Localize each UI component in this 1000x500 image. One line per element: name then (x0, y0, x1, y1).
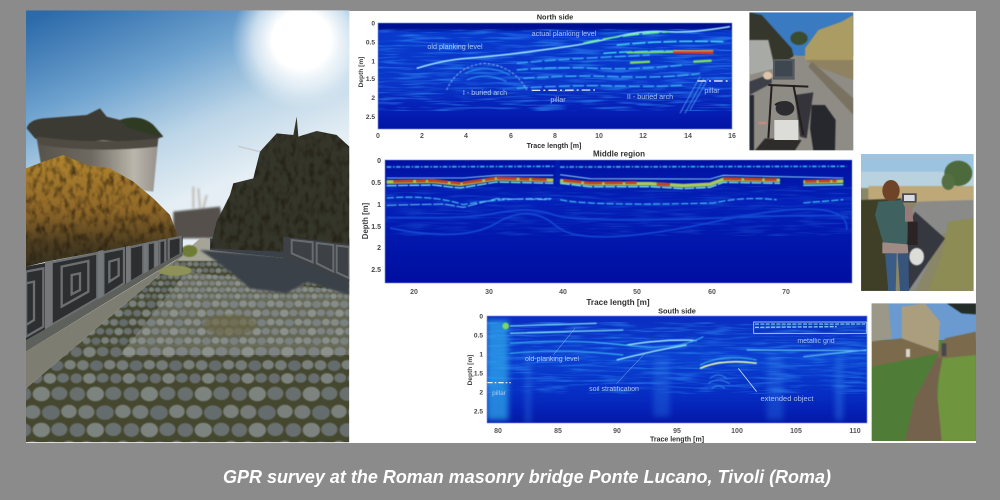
y axis: 1.5 (366, 76, 375, 83)
plot frame (378, 23, 732, 129)
chart: Middle region radargram (361, 150, 852, 307)
cobbled road (20, 235, 353, 445)
y axis: 0 (479, 314, 483, 320)
plot area (487, 316, 867, 423)
y axis (358, 20, 375, 121)
y axis: 0 (371, 20, 375, 28)
y axis: 0.5 (474, 332, 483, 340)
plot area: metallic grid (797, 338, 835, 345)
title: North side (537, 12, 573, 22)
x axis: 8 (553, 133, 557, 140)
street lamp (238, 146, 260, 152)
x axis (376, 133, 736, 150)
x axis: 6 (509, 133, 513, 140)
y axis: 1 (371, 58, 375, 66)
y axis: 2 (371, 95, 375, 102)
photo: survey on grassy path (872, 303, 976, 441)
plot frame (385, 160, 852, 283)
y axis: 1 (479, 352, 483, 358)
plot area: actual planking level (532, 29, 597, 38)
x axis: 20 (410, 289, 418, 296)
x axis: Trace length [m] (650, 436, 704, 444)
road shadow (200, 250, 349, 295)
x axis: 80 (494, 428, 502, 435)
moss patch (203, 314, 257, 336)
title: Middle region (593, 150, 645, 158)
y axis: 2.5 (371, 267, 381, 274)
x axis: 90 (613, 428, 621, 435)
y axis: 1 (377, 202, 381, 209)
y axis: Depth [m] (467, 355, 474, 385)
y axis: 0.5 (371, 180, 381, 187)
y axis: 0.5 (366, 40, 375, 46)
x axis: 30 (485, 289, 493, 296)
operator figure (875, 180, 918, 291)
x axis: 12 (639, 133, 647, 140)
x axis: 50 (633, 289, 641, 296)
y axis: 2.5 (366, 114, 375, 121)
chart: North side radargram (358, 12, 736, 150)
plot area: II - buried arch (627, 92, 673, 101)
plot area: soil stratification (589, 386, 639, 393)
y axis: 1.5 (474, 370, 483, 378)
sky with sun (26, 0, 372, 277)
dark vegetation on right (210, 117, 349, 252)
right railing (283, 237, 349, 282)
sidewalk (26, 256, 183, 388)
grass tufts (158, 245, 197, 276)
annotations: old planking level (427, 42, 483, 51)
Tor Tiburtina round tower (27, 108, 163, 192)
y axis: 2.5 (474, 408, 483, 416)
caption: GPR survey at the Roman masonry bridge Ponte Lucano, Tivoli (Roma) (223, 467, 831, 487)
y axis: 2 (377, 245, 381, 252)
x axis: 60 (708, 289, 716, 296)
distant trees and buildings (173, 187, 227, 238)
y axis: Depth [m] (361, 202, 370, 239)
x axis: 14 (684, 133, 692, 140)
title: South side (658, 306, 696, 316)
x axis: 95 (673, 428, 681, 435)
x axis: 4 (464, 133, 468, 140)
plot area: pillar (550, 95, 566, 104)
y axis (361, 158, 381, 274)
x axis: Trace length [m] (527, 142, 581, 150)
plot area: pillar (492, 390, 507, 397)
x axis: 40 (559, 289, 567, 296)
laptop (773, 59, 795, 80)
y axis: 1.5 (371, 224, 381, 231)
x axis: 110 (849, 428, 861, 435)
x axis: 2 (420, 133, 424, 140)
plot area: pillar (704, 86, 720, 95)
photo: Ponte Lucano bridge road and tower (26, 10, 350, 442)
plot area: extended object (761, 394, 814, 403)
x axis: 16 (728, 133, 736, 140)
plot area (385, 160, 852, 283)
x axis: Trace length [m] (586, 298, 650, 307)
plot area (378, 23, 732, 129)
plot frame (487, 316, 867, 423)
y axis (467, 314, 483, 416)
photo: GPR cart on road (749, 12, 853, 150)
x axis: 0 (376, 133, 380, 140)
orange reeds (26, 155, 177, 267)
x axis: 10 (595, 133, 603, 140)
x axis: 70 (782, 289, 790, 296)
x axis: 85 (554, 428, 562, 435)
GPR cart (758, 85, 808, 140)
x axis: 100 (731, 428, 743, 435)
sunlit tint on middle of road (120, 272, 349, 355)
ground in shade under vegetation (207, 238, 349, 295)
left railing (26, 237, 183, 352)
photo: operator with tablet (861, 154, 974, 291)
x axis: 105 (790, 428, 802, 435)
annotations: old-planking level (525, 356, 579, 363)
x axis (410, 289, 790, 307)
y axis: 0 (377, 158, 381, 165)
y axis: 2 (479, 390, 483, 396)
plot area: I - buried arch (463, 88, 507, 97)
chart: South side radargram (467, 306, 867, 444)
y axis: Depth [m] (358, 57, 365, 87)
x axis (494, 428, 861, 444)
